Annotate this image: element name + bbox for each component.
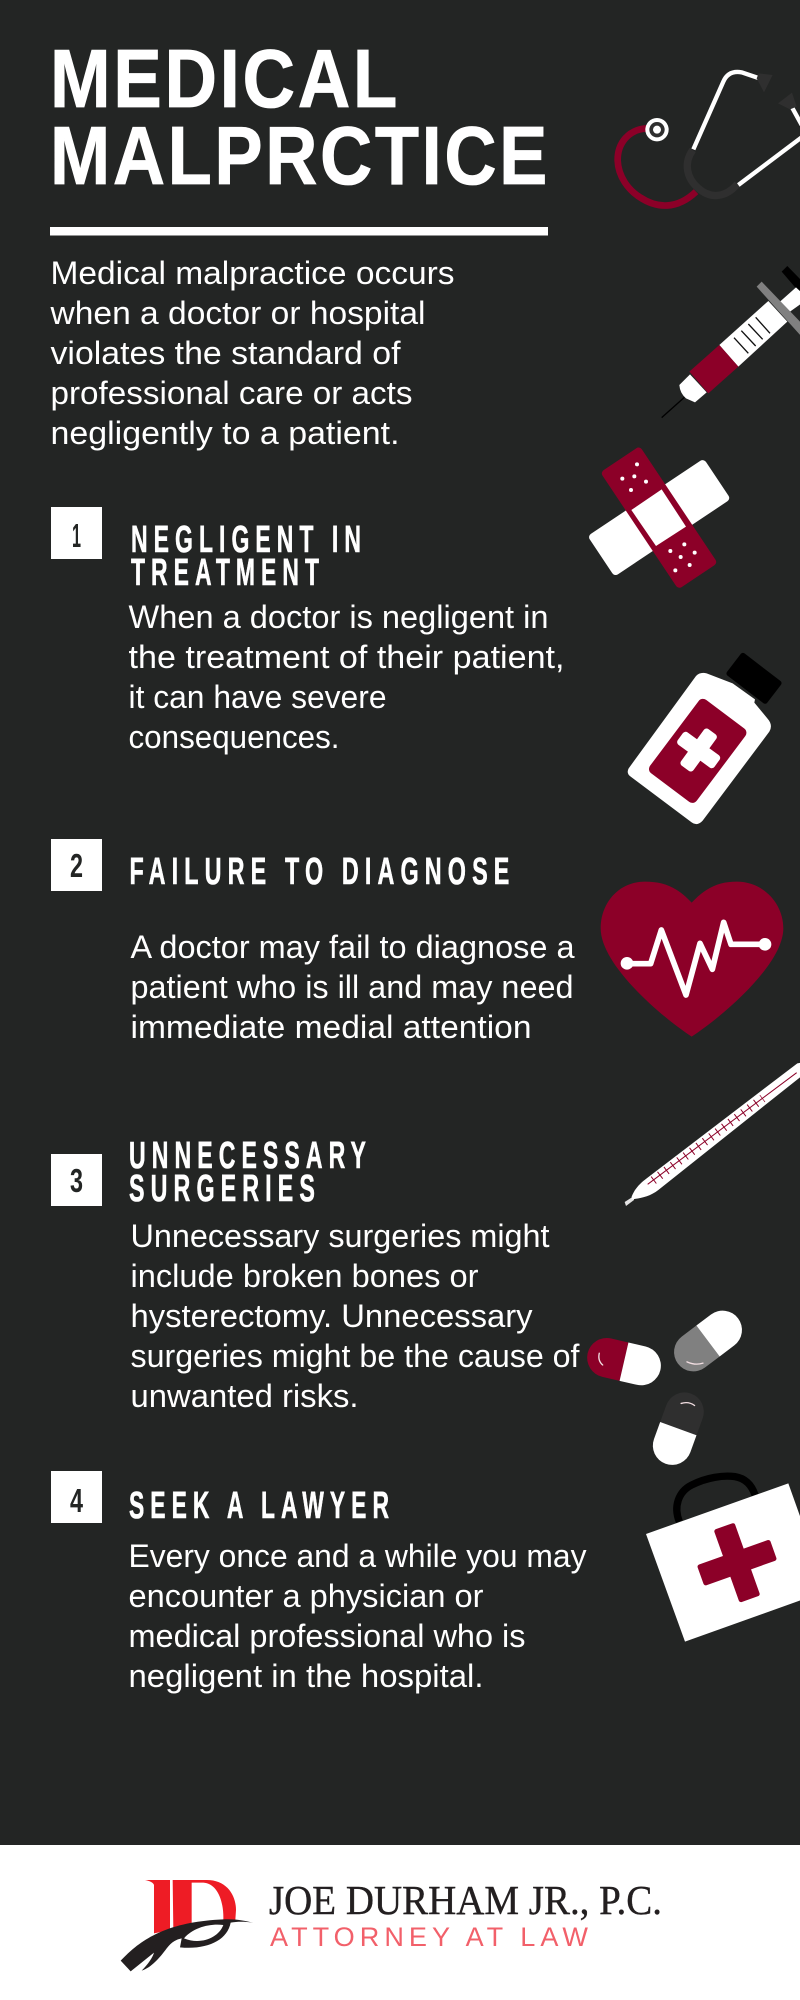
logo text: JOE DURHAM JR., P.C. (269, 1877, 662, 1923)
title: MEDICAL (50, 32, 400, 125)
number badge 4: 4 (70, 1482, 83, 1519)
grey and white capsule (666, 1303, 750, 1379)
panel: item 1 (51, 507, 564, 755)
panel: item 2 (51, 839, 575, 1045)
red and white capsule (583, 1334, 665, 1389)
heading 1: TREATMENT (131, 552, 325, 594)
body 4: encounter a physician or (128, 1578, 484, 1614)
panel: item 4 (51, 1471, 586, 1694)
number badge 1 (51, 507, 102, 559)
number badge 2 (51, 839, 102, 891)
intro text: negligently to a patient. (50, 415, 400, 451)
body 1: consequences. (128, 719, 340, 755)
number badge 3 (51, 1154, 102, 1206)
body 1: the treatment of their patient, (128, 639, 564, 675)
heading 3: UNNECESSARY (129, 1135, 372, 1177)
number badge 3: 3 (70, 1162, 83, 1199)
heading 1 (131, 519, 367, 594)
heading 3 (129, 1135, 372, 1210)
icon: syringe (662, 266, 800, 418)
body 4: Every once and a while you may (128, 1538, 586, 1574)
panel: item 3 (51, 1135, 580, 1414)
body 3: surgeries might be the cause of (130, 1338, 580, 1374)
body 1 (128, 599, 564, 755)
body 2: A doctor may fail to diagnose a (130, 929, 575, 965)
heading 2: FAILURE TO DIAGNOSE (130, 851, 516, 893)
logo text: ATTORNEY AT LAW (270, 1922, 593, 1952)
body 3: Unnecessary surgeries might (130, 1218, 550, 1254)
dark and white capsule (647, 1387, 709, 1470)
intro text: when a doctor or hospital (49, 295, 426, 331)
number badge 1: 1 (72, 517, 81, 554)
body 3 (130, 1218, 580, 1414)
footer band (0, 1845, 800, 2000)
icon: bandage (588, 446, 731, 589)
icon: medicine bottle (628, 652, 783, 824)
intro text (49, 255, 455, 451)
body 3: include broken bones or (130, 1258, 479, 1294)
intro text: professional care or acts (50, 375, 412, 411)
body 1: When a doctor is negligent in (128, 599, 548, 635)
body 4: negligent in the hospital. (128, 1658, 484, 1694)
heading 1: NEGLIGENT IN (131, 519, 367, 561)
icon: stethoscope (618, 72, 800, 206)
body 2: immediate medial attention (130, 1009, 532, 1045)
icon: thermometer (625, 1063, 800, 1206)
icon: heart with pulse (601, 882, 783, 1037)
icon: first aid kit (646, 1476, 800, 1642)
title rule (50, 227, 548, 236)
body 3: unwanted risks. (130, 1378, 358, 1414)
title: MALPRCTICE (50, 109, 550, 202)
body 2: patient who is ill and may need (130, 969, 574, 1005)
body 2 (130, 929, 575, 1045)
number badge 2: 2 (70, 847, 83, 884)
body 1: it can have severe (128, 679, 386, 715)
icon: pills (583, 1303, 750, 1470)
body 4: medical professional who is (128, 1618, 526, 1654)
title (50, 32, 550, 202)
number badge 4 (51, 1471, 102, 1523)
body 4 (128, 1538, 586, 1694)
logo text (269, 1877, 662, 1952)
intro text: Medical malpractice occurs (50, 255, 455, 291)
intro text: violates the standard of (50, 335, 401, 371)
logo mark (121, 1880, 253, 1971)
body 3: hysterectomy. Unnecessary (130, 1298, 532, 1334)
heading 4: SEEK A LAWYER (129, 1485, 395, 1527)
heading 3: SURGERIES (129, 1168, 321, 1210)
